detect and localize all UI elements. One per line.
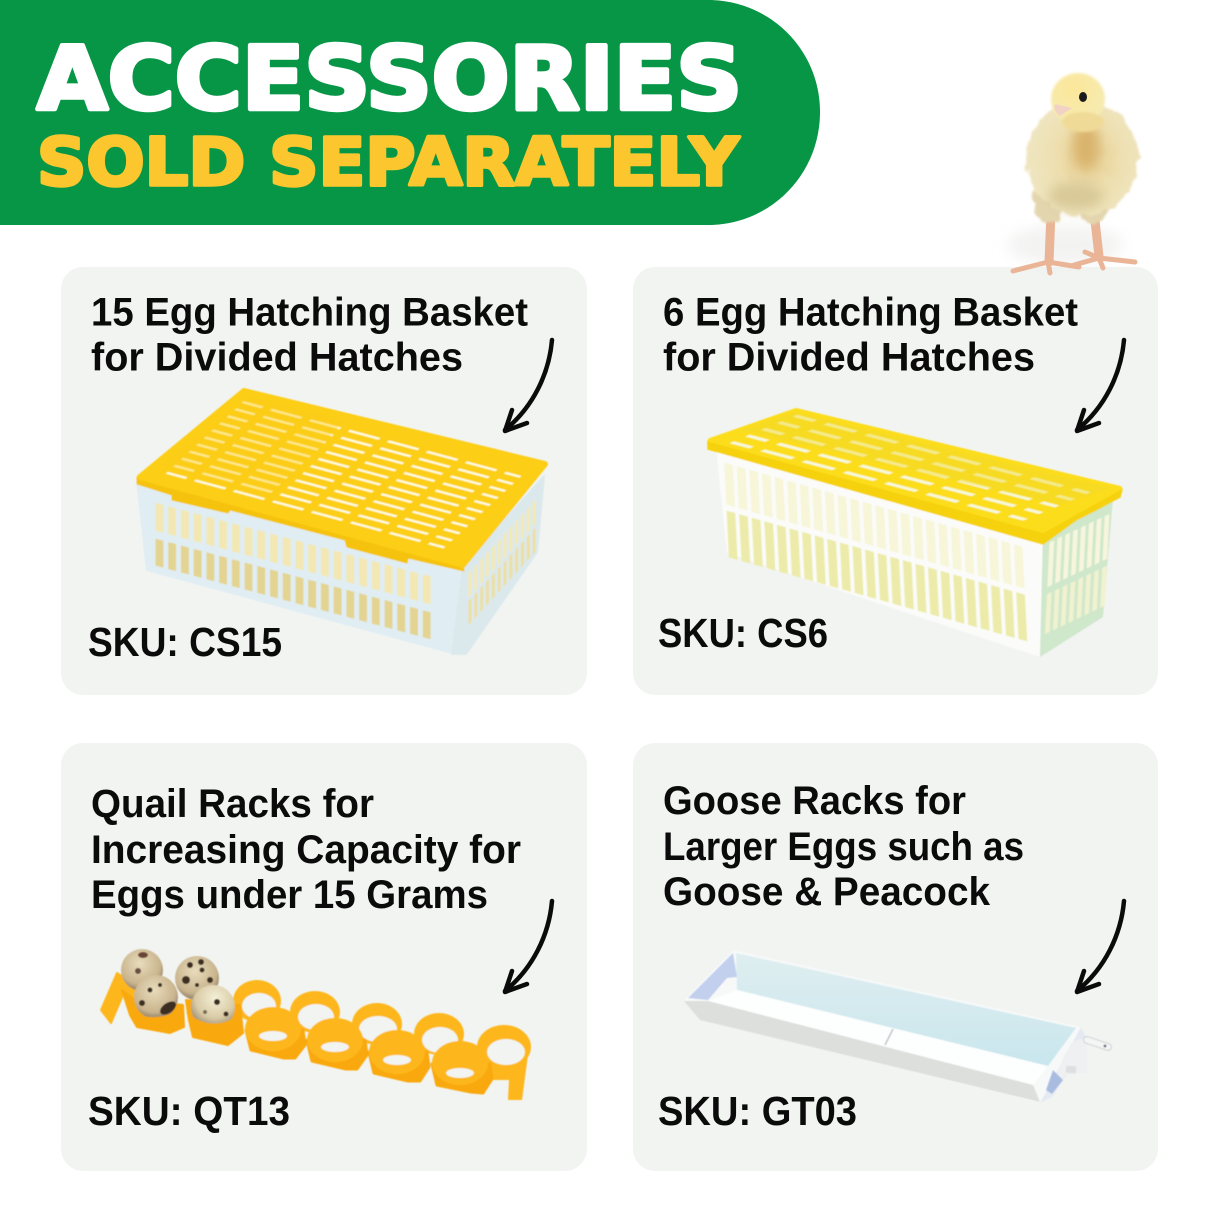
heading: for Divided Hatches — [663, 336, 1035, 380]
subtitle: sold separately: SOLD SEPARATELY — [37, 124, 740, 201]
heading: 6 Egg Hatching Basket — [663, 290, 1078, 334]
product image: quail rack QT13 — [101, 949, 531, 1100]
heading — [91, 290, 528, 380]
panel: quail racks — [61, 743, 587, 1171]
arrow — [505, 901, 552, 992]
sku label: SKU: CS6 — [658, 610, 828, 656]
heading: Increasing Capacity for — [91, 828, 521, 872]
panel: 15 egg hatching basket — [61, 267, 587, 695]
product image: basket CS15 — [137, 391, 545, 654]
arrow — [505, 340, 552, 431]
product image: goose rack GT03 — [684, 950, 1108, 1103]
chick legs and feet — [1013, 212, 1135, 273]
chick face — [1055, 92, 1087, 116]
quail eggs — [121, 949, 235, 1029]
arrow — [1077, 901, 1124, 992]
sku label: SKU: GT03 — [658, 1088, 857, 1134]
rack cups holding eggs — [122, 990, 243, 1045]
heading: Goose Racks for — [663, 779, 966, 823]
panel: goose racks — [633, 743, 1158, 1171]
product image: basket CS6 — [708, 410, 1122, 657]
heading: Eggs under 15 Grams — [91, 873, 488, 917]
chick body — [1026, 100, 1138, 224]
heading — [91, 782, 521, 917]
panel: 6 egg hatching basket — [633, 267, 1158, 695]
heading — [663, 779, 1024, 914]
sku label: SKU: QT13 — [88, 1088, 290, 1134]
chick illustration — [1007, 73, 1138, 273]
heading: Quail Racks for — [91, 782, 374, 826]
header banner — [0, 0, 820, 225]
heading: for Divided Hatches — [91, 336, 463, 380]
sku label: SKU: CS15 — [88, 619, 282, 665]
heading: Larger Eggs such as — [663, 825, 1024, 869]
chick head — [1051, 73, 1105, 132]
rack back row — [101, 973, 531, 1100]
heading: 15 Egg Hatching Basket — [91, 290, 528, 334]
heading — [663, 290, 1078, 380]
heading: Goose & Peacock — [663, 870, 991, 914]
rack front row — [245, 1007, 492, 1093]
arrow — [1077, 340, 1124, 431]
title: accessories: ACCESSORIES — [37, 28, 742, 130]
